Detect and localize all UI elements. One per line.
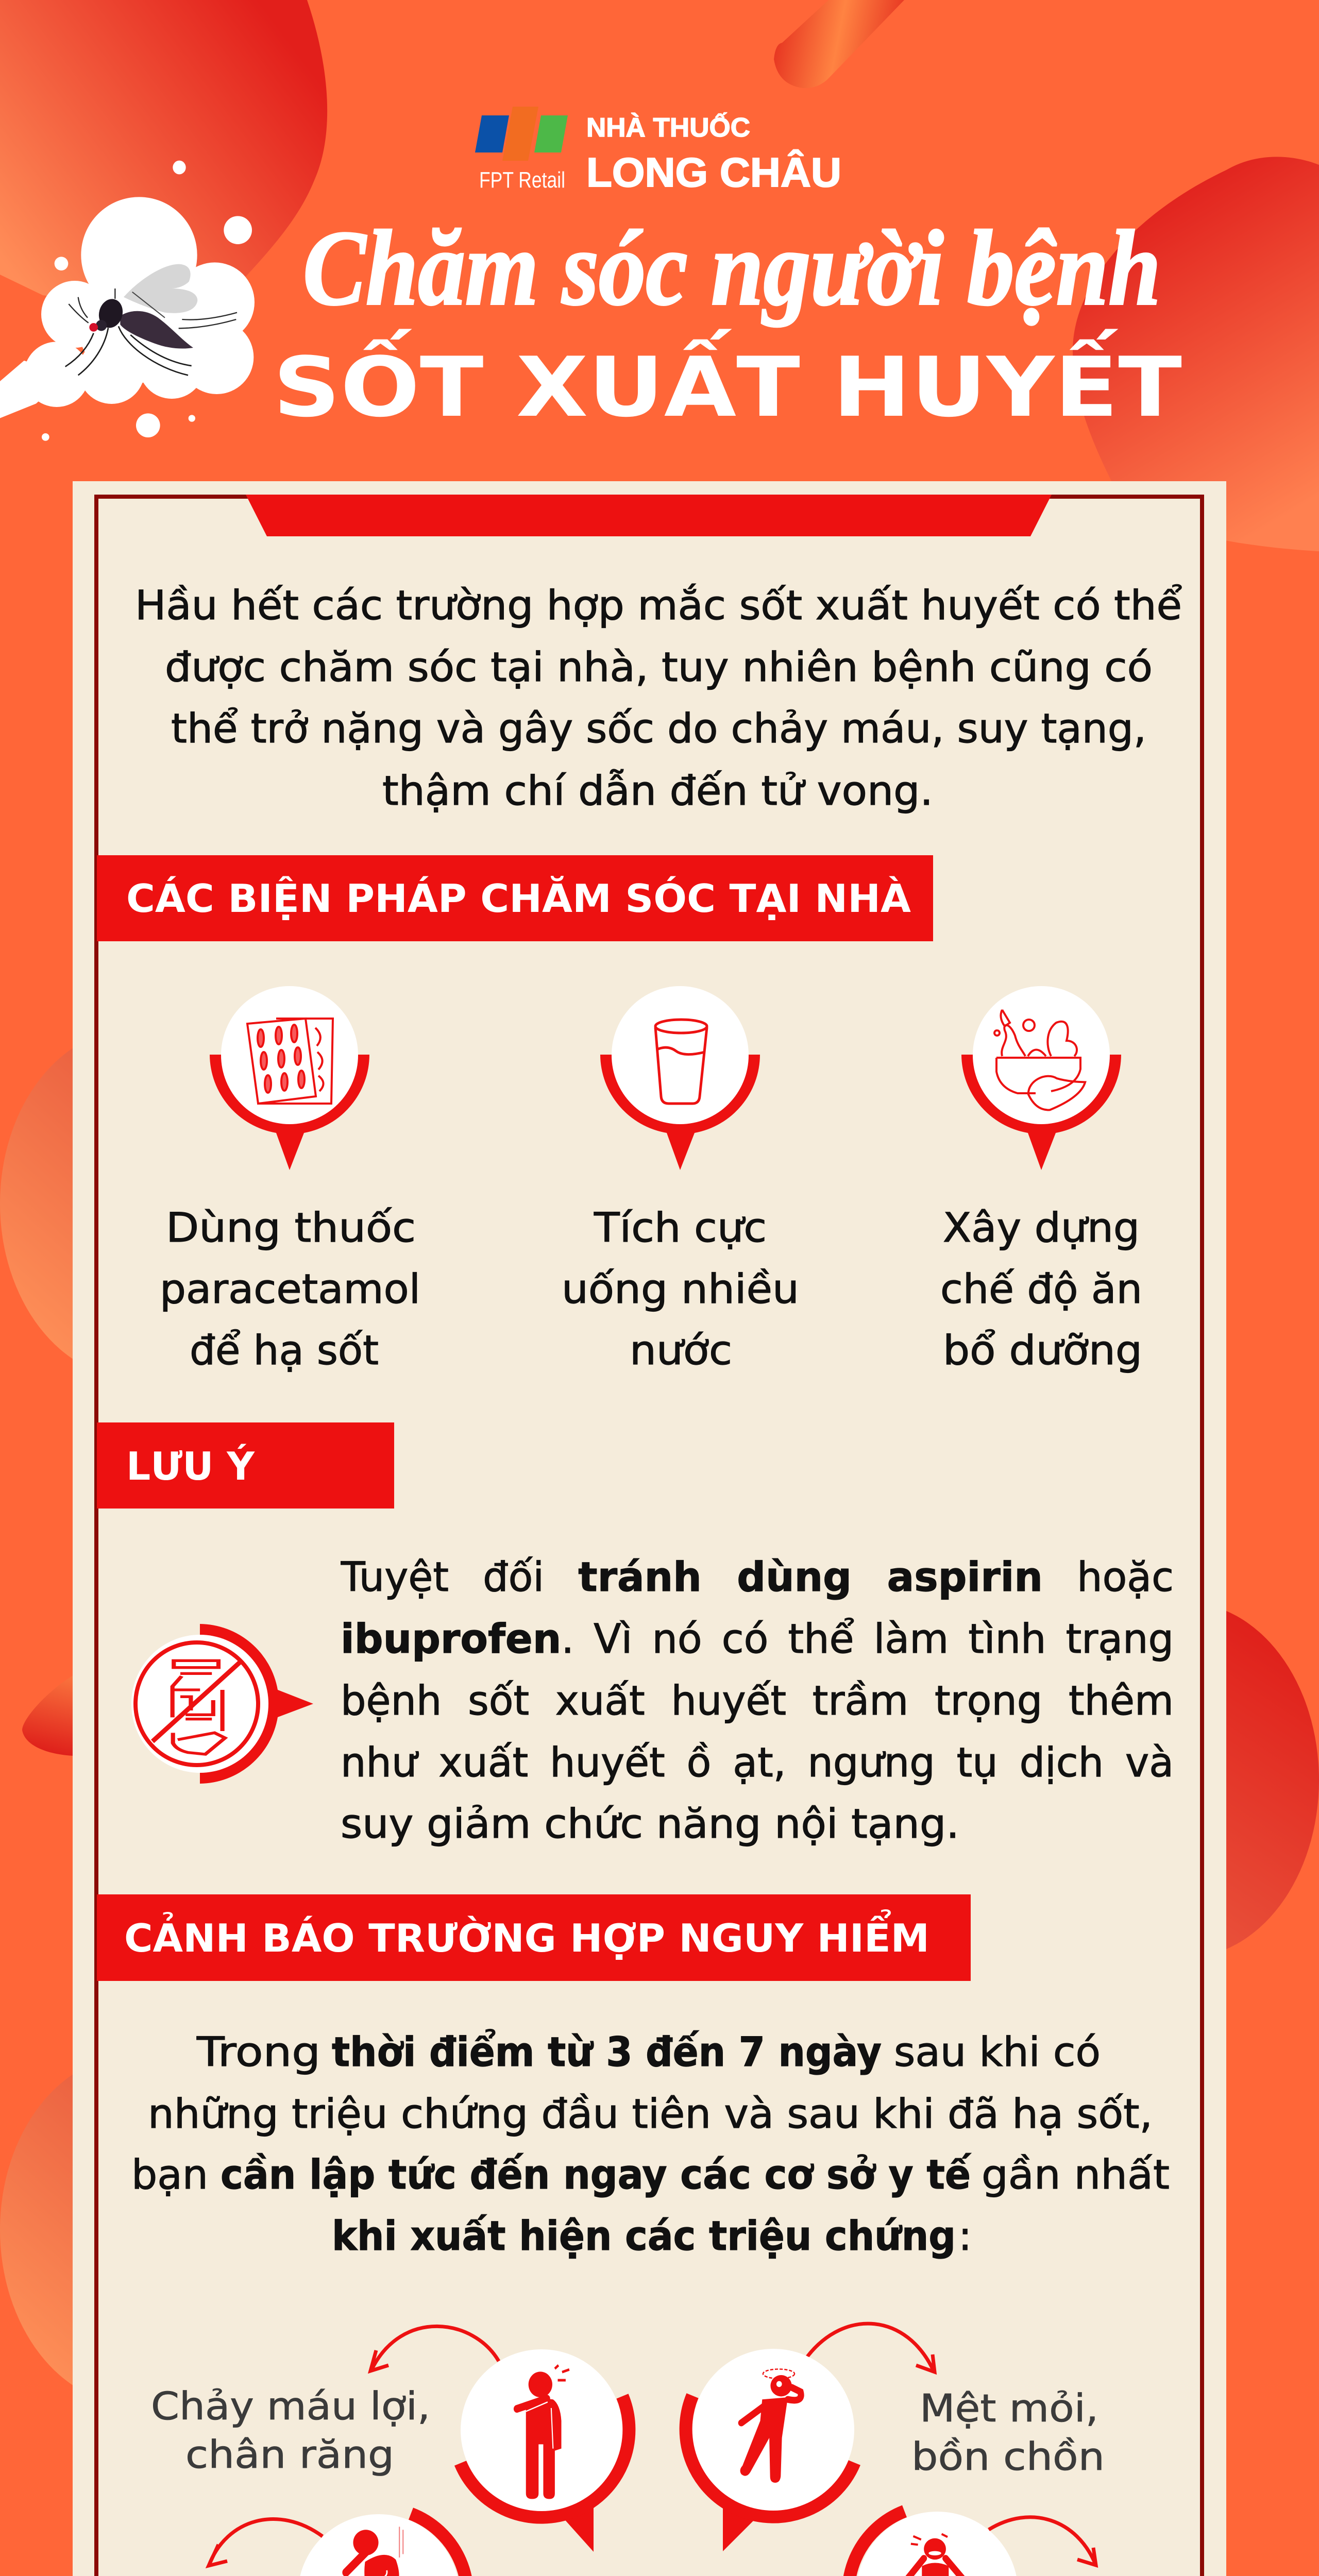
label: chân răng — [185, 2433, 394, 2477]
warning text: justified lines: bệnh sốt xuất huyết trầm trọng thêm — [341, 1678, 1174, 1724]
label: bồn chồn — [911, 2435, 1105, 2479]
label — [151, 2384, 430, 2477]
icon: no medicine bottle — [131, 1624, 313, 1784]
icon: food bowl pin — [961, 986, 1121, 1170]
label: drink water: nước — [630, 1328, 732, 1374]
intro text block: thể trở nặng và gây sốc do chảy máu, suy tạng, — [171, 706, 1146, 752]
symptom: rapid breathing — [815, 2511, 1130, 2576]
intro text block: Hầu hết các trường hợp mắc sốt xuất huyết có thể — [135, 583, 1182, 629]
title: bold line: SỐT XUẤT HUYẾT — [273, 328, 1182, 435]
panel: inner border — [96, 497, 1202, 2576]
arrow — [370, 2326, 499, 2371]
background pill: left middle — [22, 1663, 103, 1756]
label: drink water: Tích cực — [594, 1205, 767, 1251]
background pill: top centre — [774, 0, 904, 88]
intro text block: thậm chí dẫn đến tử vong. — [382, 768, 933, 815]
background blob: right middle — [1051, 1602, 1319, 1958]
warning text: justified lines: Tuyệt đối tránh dùng aspirin hoặc — [341, 1554, 1174, 1601]
speech bubble — [461, 2349, 629, 2552]
intro text block: được chăm sóc tại nhà, tuy nhiên bệnh cũng có — [165, 645, 1153, 691]
warning text: justified lines: ibuprofen. Vì nó có thể làm tình trạng — [341, 1616, 1174, 1663]
danger paragraph: : — [958, 2213, 972, 2260]
icon: person coughing — [517, 2365, 569, 2499]
icon: person breathless — [908, 2534, 962, 2576]
danger paragraph — [131, 2029, 1170, 2260]
danger paragraph: những triệu chứng đầu tiên và sau khi đã hạ sốt, — [148, 2091, 1153, 2138]
label: Chảy máu lợi, — [151, 2384, 430, 2429]
danger paragraph: sau khi có — [894, 2029, 1101, 2076]
danger paragraph: bạn — [131, 2152, 208, 2198]
arrow — [807, 2324, 935, 2372]
speech bubble — [686, 2349, 854, 2551]
logo: FPT Retail Long Châu — [475, 107, 841, 195]
label: Mệt mỏi, — [920, 2386, 1098, 2431]
heading: note — [97, 1422, 394, 1509]
warning text: justified lines: như xuất huyết ồ ạt, ngưng tụ dịch và — [341, 1740, 1174, 1786]
warning text: last line: suy giảm chức năng nội tạng. — [341, 1801, 959, 1848]
danger paragraph: thời điểm từ 3 đến 7 ngày — [332, 2029, 882, 2076]
danger paragraph: cần lập tức đến ngay các cơ sở y tế — [221, 2152, 971, 2198]
speech bubble — [298, 2514, 502, 2576]
symptom: continuous vomiting — [126, 2514, 502, 2576]
label: drink water — [562, 1205, 799, 1374]
icon: glass of water pin — [600, 986, 760, 1170]
icon: person nauseous — [346, 2527, 412, 2576]
speech bubble — [815, 2511, 1018, 2576]
ribbon: top red trapezoid — [246, 495, 1052, 536]
background blob: left upper — [0, 1028, 270, 1379]
logo: FPT Retail Long Châu: LONG CHÂU — [586, 149, 841, 195]
care item: paracetamol — [160, 986, 420, 1374]
label: nutrition: bổ dưỡng — [943, 1328, 1142, 1374]
heading: dangerous cases — [97, 1894, 971, 1981]
label: paracetamol: để hạ sốt — [190, 1328, 379, 1374]
label: nutrition: chế độ ăn — [940, 1266, 1142, 1313]
symptom: bleeding gums — [151, 2326, 629, 2552]
logo: FPT Retail Long Châu: FPT Retail — [479, 167, 565, 193]
arrow — [209, 2519, 323, 2566]
heading: home care measures: CÁC BIỆN PHÁP CHĂM SÓC TẠI NHÀ — [126, 876, 911, 921]
panel: main content card — [73, 481, 1226, 2576]
symptom: tired, restless — [686, 2324, 1105, 2551]
logo: FPT Retail Long Châu: NHÀ THUỐC — [586, 112, 750, 143]
heading: dangerous cases: CẢNH BÁO TRƯỜNG HỢP NGUY HIỂM — [124, 1909, 929, 1961]
icon: mosquito on white cloud — [0, 161, 255, 441]
heading: note: LƯU Ý — [126, 1444, 256, 1489]
background blob: top right — [1073, 157, 1319, 551]
care item: nutrition — [940, 986, 1142, 1374]
icon: pill blister pin — [210, 986, 369, 1170]
label: nutrition: Xây dựng — [943, 1205, 1140, 1251]
label — [911, 2386, 1105, 2479]
icon: dizzy person — [740, 2369, 801, 2483]
label: paracetamol: Dùng thuốc — [166, 1205, 416, 1251]
background blob: left lower — [0, 2055, 270, 2405]
title: script line: Chăm sóc người bệnh — [303, 209, 1161, 327]
intro text block — [135, 583, 1182, 815]
arrow — [989, 2517, 1096, 2565]
heading: home care measures — [97, 855, 933, 941]
danger paragraph: Trong — [196, 2029, 320, 2076]
label: paracetamol: paracetamol — [160, 1266, 420, 1313]
danger paragraph: gần nhất — [982, 2152, 1170, 2198]
label: nutrition — [940, 1205, 1142, 1374]
care item: drink water — [562, 986, 799, 1374]
warning text: justified lines — [341, 1554, 1174, 1786]
background blob: top left — [0, 0, 327, 319]
label: drink water: uống nhiều — [562, 1266, 799, 1313]
danger paragraph: khi xuất hiện các triệu chứng — [332, 2213, 956, 2260]
label: paracetamol — [160, 1205, 420, 1374]
